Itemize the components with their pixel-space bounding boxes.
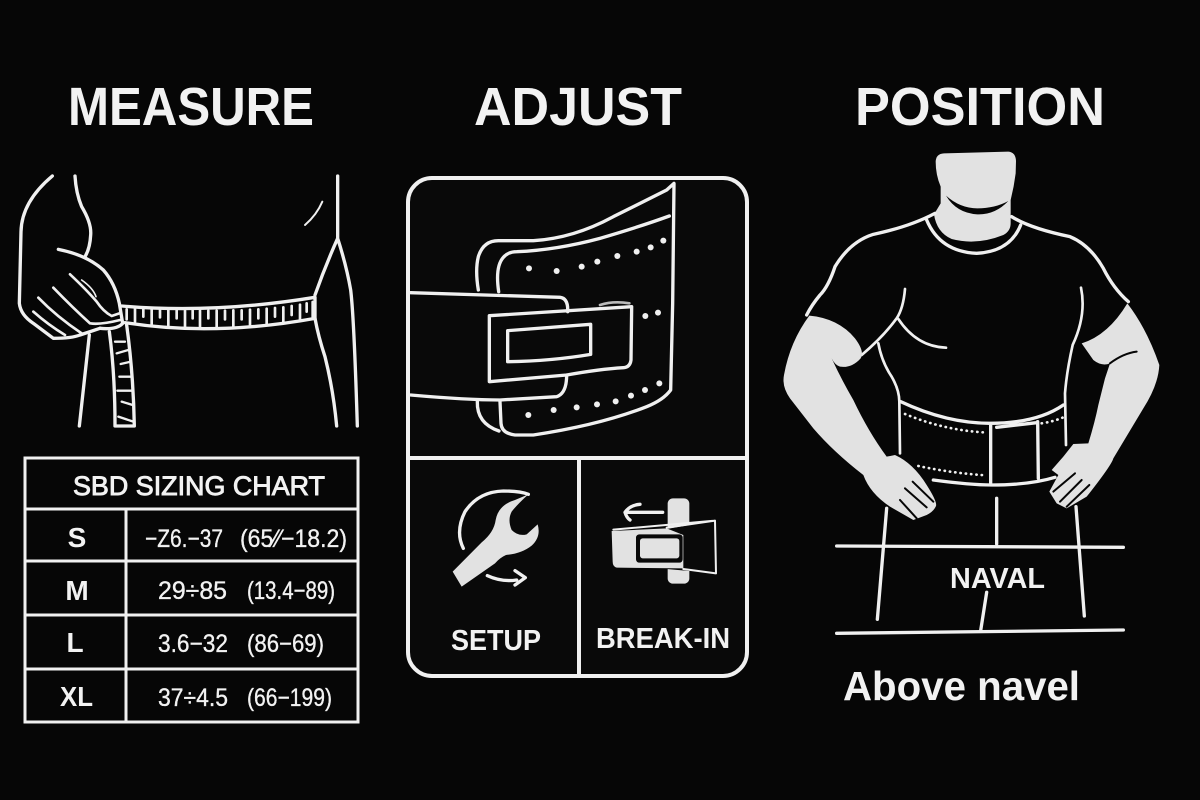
row: S: S: [68, 522, 86, 553]
row: M: (13.4−89): [247, 577, 335, 605]
heading: position: POSITION: [855, 77, 1105, 137]
body outline: [75, 176, 357, 426]
row: M: [65, 575, 335, 606]
trousers and navel guide lines: [837, 498, 1123, 633]
hand holding tape: [19, 176, 123, 338]
row: S: [68, 522, 347, 553]
belt body: [477, 183, 674, 435]
belt strap: [411, 293, 568, 400]
sizing chart: [25, 458, 358, 722]
row: XL: [60, 681, 332, 712]
row: XL: 37÷4.5: [158, 684, 228, 712]
label: naval: NAVAL: [950, 563, 1045, 595]
row: M: 29÷85: [158, 577, 227, 605]
panel: adjust: [408, 178, 747, 676]
lever buckle: [489, 302, 632, 382]
belt holes: [525, 238, 666, 418]
illustration: lever belt with buckle: [411, 183, 674, 435]
panel frame and dividers: [408, 178, 747, 676]
row: L: L: [66, 627, 84, 658]
illustration: torso wearing belt above navel: [783, 152, 1159, 633]
row: L: 3.6−32: [158, 630, 228, 658]
measuring tape: horizontal band: [122, 297, 315, 329]
label: setup: SETUP: [451, 625, 541, 657]
row: XL: XL: [60, 681, 93, 712]
caption: above navel: Above navel: [843, 663, 1080, 709]
table title: SBD SIZING CHART: [73, 471, 325, 501]
table frame and grid: [25, 458, 358, 722]
illustration: waist being measured with tape: [19, 176, 357, 426]
label: break-in: BREAK-IN: [596, 623, 730, 655]
right arm and hand: [1049, 303, 1159, 508]
measuring tape: hanging end: [109, 325, 134, 426]
row: L: [66, 627, 324, 658]
lifting belt: [901, 402, 1063, 485]
t-shirt outline: [807, 213, 1128, 453]
left arm and hand: [783, 316, 936, 520]
row: S: −Z6.−37: [145, 525, 223, 553]
icon: wrench with rotation arrows: [453, 491, 539, 587]
heading: adjust: ADJUST: [474, 77, 682, 137]
row: S: (65⁄⁄−18.2): [240, 525, 347, 553]
row: M: M: [65, 575, 89, 606]
head and neck: [934, 152, 1016, 242]
heading: measure: MEASURE: [68, 77, 314, 137]
row: L: (86−69): [247, 630, 324, 658]
row: XL: (66−199): [247, 684, 332, 712]
icon: buckle sliding on strap: [612, 498, 716, 584]
